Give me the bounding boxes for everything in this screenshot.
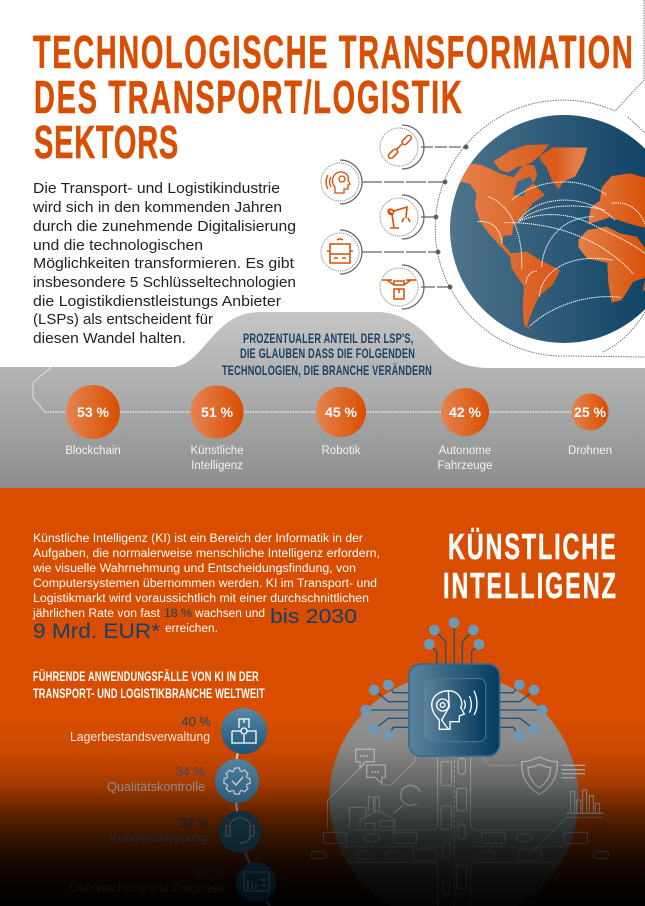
metric: robotics: 45 % <box>325 404 358 420</box>
dotted connector line for percentages <box>33 367 590 412</box>
heading: share of LSPs: DIE GLAUBEN DASS DIE FOLGENDEN <box>240 345 415 362</box>
text block: introduction: die Logistikdienstleistungs Anbieter <box>33 294 281 310</box>
chip circuit traces <box>366 623 542 735</box>
panel: orange AI section <box>0 488 645 906</box>
text block: introduction: insbesondere 5 Schlüsseltechnologien <box>33 275 296 291</box>
use case: inventory: Lagerbestandsverwaltung <box>70 730 210 744</box>
use case: quality control <box>107 759 259 803</box>
chip inner plate <box>423 679 486 742</box>
heading: Künstliche Intelligenz: KÜNSTLICHE <box>448 528 616 567</box>
use case: monitoring: Überwachung und Diagnose <box>70 881 224 895</box>
metric: blockchain: Blockchain <box>65 445 121 457</box>
metric: artificial intelligence: 51 % <box>201 404 234 420</box>
use case: quality control: 34 % <box>175 764 205 779</box>
metric: drones <box>568 394 612 457</box>
metric: drones: Drohnen <box>568 445 612 457</box>
chart: dotted trade routes <box>477 182 645 326</box>
text block: introduction: Möglichkeiten transformieren. Es gibt <box>33 256 294 272</box>
metric: artificial intelligence: Künstliche <box>190 445 244 457</box>
heading: share of LSPs: PROZENTUALER ANTEIL DER LSP'S, <box>243 330 413 347</box>
metric: artificial intelligence: Intelligenz <box>191 460 243 472</box>
heading: share of LSPs <box>222 330 432 379</box>
metric: artificial intelligence <box>190 386 244 472</box>
text block: AI description: 9 Mrd. EUR* <box>33 620 160 643</box>
metric: drones: 25 % <box>574 404 607 420</box>
panel: grey technologies band <box>0 312 645 488</box>
icon: autonomous truck <box>321 230 362 274</box>
chart: technology percentages <box>65 385 612 472</box>
map: continents <box>460 144 645 331</box>
text block: AI description: 18 % <box>164 608 192 620</box>
chip circuit nodes <box>360 617 548 740</box>
metric: autonomous vehicles: 42 % <box>449 404 482 420</box>
heading: leading use cases: TRANSPORT- UND LOGISTIKBRANCHE WELTWEIT <box>33 685 265 702</box>
text block: AI description: Künstliche Intelligenz (KI) ist ein Bereich der Informatik in der <box>33 533 363 545</box>
text block: introduction: diesen Wandel halten. <box>33 331 186 347</box>
icon: AI head on chip <box>432 691 477 729</box>
use case: monitoring <box>70 862 276 902</box>
text block: introduction: Die Transport- und Logistikindustrie <box>33 181 280 197</box>
text block: AI description: wie visuelle Wahrnehmung und Entscheidungsfindung, von <box>32 563 356 575</box>
icon connectors to the globe ring <box>362 145 468 289</box>
icon: drone with parcel <box>380 265 424 309</box>
chart: AI use cases <box>70 708 276 906</box>
title: SEKTORS <box>34 117 178 169</box>
chip body <box>409 664 500 756</box>
metric: blockchain <box>65 385 121 457</box>
heading: share of LSPs: TECHNOLOGIEN, DIE BRANCHE VERÄNDERN <box>222 361 432 379</box>
text block: introduction: und die technologischen <box>33 238 203 254</box>
text block: AI description: Aufgaben, die normalerweise menschliche Intelligenz erfordern, <box>33 548 380 560</box>
chart: world globe with routes <box>450 115 645 343</box>
use case: customer care: 32 % <box>179 815 209 830</box>
heading: Künstliche Intelligenz: INTELLIGENZ <box>443 567 616 606</box>
text block: introduction <box>32 181 296 347</box>
metric: autonomous vehicles: Autonome <box>439 445 491 457</box>
metric: autonomous vehicles: Fahrzeuge <box>438 460 492 472</box>
heading: Künstliche Intelligenz <box>443 528 616 606</box>
heading: leading use cases <box>33 667 265 702</box>
text block: introduction: (LSPs) als entscheident für <box>33 312 213 328</box>
text block: AI description: erreichen. <box>165 623 218 635</box>
decorative dotted frame around globe <box>435 0 645 357</box>
use case: inventory: 40 % <box>181 714 211 729</box>
text block: AI description: Computersystemen übernommen werden. KI im Transport- und <box>33 578 377 590</box>
title: DES TRANSPORT/LOGISTIK <box>34 72 462 124</box>
text block: introduction: durch die zunehmende Digitalisierung <box>33 219 296 235</box>
use case: monitoring: 31 % <box>195 865 225 880</box>
text block: AI description: bis 2030 <box>270 606 357 628</box>
text block: introduction: wird sich in den kommenden Jahren <box>32 200 282 216</box>
icon: AI head <box>321 160 362 204</box>
metric: robotics <box>316 387 366 457</box>
title <box>33 27 633 169</box>
illustration: AI chip over smart city <box>311 617 609 906</box>
use case: quality control: Qualitätskontrolle <box>107 780 205 794</box>
text block: AI description: wachsen und <box>194 608 265 620</box>
icon: blockchain chain <box>380 125 424 169</box>
heading: leading use cases: FÜHRENDE ANWENDUNGSFÄLLE VON KI IN DER <box>33 667 259 685</box>
overlay: dark fade at bottom <box>0 700 645 906</box>
title: TECHNOLOGISCHE TRANSFORMATION <box>33 27 633 79</box>
map: Hudson bay <box>513 177 533 197</box>
use case: customer care: Kundenbetreuung <box>110 831 208 845</box>
metric: autonomous vehicles <box>438 388 492 472</box>
text block: AI description: Logistikmarkt wird voraussichtlich mit einer durchschnittlichen <box>33 593 369 605</box>
metric: robotics: Robotik <box>322 445 361 457</box>
use case: inventory <box>70 708 267 754</box>
text block: AI description: jährlichen Rate von fast <box>32 608 161 620</box>
metric: blockchain: 53 % <box>77 404 110 420</box>
city roads and buildings <box>311 749 609 906</box>
use case: customer care <box>110 811 261 853</box>
text block: AI description <box>32 533 380 643</box>
city disc <box>329 674 579 906</box>
icon: robot arm <box>380 195 424 239</box>
